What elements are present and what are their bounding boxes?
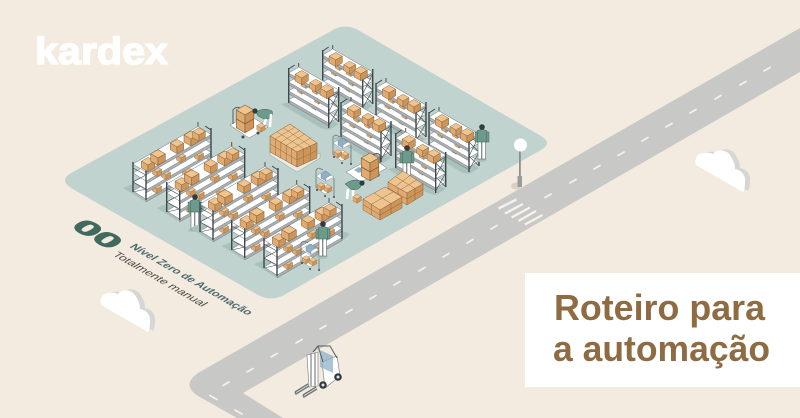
street lamp bbox=[511, 138, 527, 190]
pallet of boxes bbox=[270, 124, 320, 172]
title panel bbox=[525, 273, 800, 387]
road bbox=[190, 28, 800, 418]
worker at shelf bbox=[400, 145, 414, 183]
worker standing right bbox=[475, 124, 489, 162]
shelf row: third bbox=[368, 78, 426, 145]
shelf row: lower left 5 bbox=[254, 198, 350, 278]
warehouse floor bbox=[65, 26, 547, 298]
small trolley bbox=[333, 135, 352, 165]
shelf row: lower left 1 bbox=[123, 122, 219, 202]
shelf row: lower left 2 bbox=[157, 142, 253, 222]
cloud: left bbox=[100, 289, 155, 332]
logo: kardex: kardex bbox=[35, 31, 168, 73]
shelf row: back bbox=[315, 45, 373, 112]
level subtitle: Totalmente manual bbox=[109, 250, 210, 309]
shelf row: fifth bbox=[421, 107, 479, 174]
box stack front bbox=[363, 187, 402, 220]
title text: Roteiro para bbox=[554, 287, 766, 328]
small trolley bbox=[316, 168, 335, 198]
worker between shelves bbox=[188, 194, 202, 232]
cloud: right bbox=[695, 149, 750, 192]
shelf row: lower left 3 bbox=[190, 162, 286, 242]
shelf row: fourth bbox=[333, 97, 391, 164]
level number 00: 00 bbox=[65, 215, 131, 253]
bending worker bbox=[345, 180, 365, 203]
trolley with boxes bbox=[346, 153, 387, 185]
box stack rear bbox=[388, 171, 423, 205]
level title: Nível Zero de Automação bbox=[126, 242, 256, 317]
trolley with boxes and bending worker bbox=[230, 105, 272, 138]
crosswalk bbox=[498, 200, 542, 224]
trolley in aisle bbox=[301, 241, 320, 271]
worker with trolley bbox=[316, 221, 330, 259]
title panel: a automação bbox=[553, 328, 770, 369]
shelf row: sixth bbox=[388, 128, 446, 195]
shelf row: second bbox=[281, 63, 339, 130]
shelf row: lower left 4 bbox=[222, 180, 318, 260]
forklift bbox=[295, 346, 342, 397]
road centre dashes bbox=[210, 68, 770, 414]
